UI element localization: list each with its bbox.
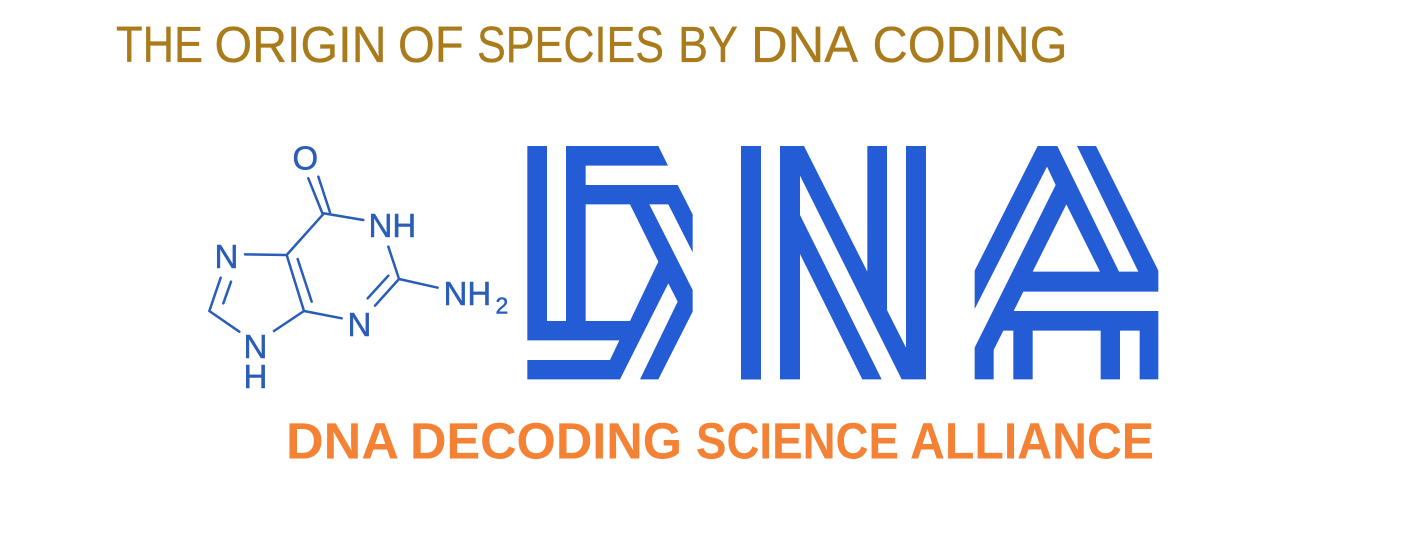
molecule atom labels: H [244, 358, 267, 395]
subtitle: alliance name: DECODING [410, 412, 682, 470]
icon: guanine molecule [209, 140, 508, 395]
title: THE [116, 16, 203, 73]
molecule atom labels: N [348, 306, 371, 343]
logo letter N [780, 146, 926, 379]
title: ORIGIN [214, 16, 386, 73]
logo letter A [975, 146, 1158, 379]
molecule bonds [209, 177, 438, 332]
title: OF [398, 16, 464, 73]
subtitle: alliance name [286, 412, 1154, 470]
molecule atom labels: NH [368, 207, 416, 244]
molecule atom labels: NH [444, 275, 491, 312]
title [116, 16, 1068, 73]
subtitle: alliance name: ALLIANCE [910, 412, 1154, 470]
title: SPECIES [477, 16, 664, 73]
title: BY [678, 16, 738, 73]
molecule atom labels: O [292, 140, 318, 176]
molecule atom labels: N [244, 328, 267, 365]
title: CODING [872, 16, 1068, 73]
subtitle: alliance name: SCIENCE [696, 412, 899, 470]
logo: DNA letters [527, 146, 1158, 380]
logo letter D [527, 146, 693, 379]
molecule atom labels: 2 [496, 292, 508, 318]
title: DNA [751, 16, 858, 73]
logo letter I [741, 146, 761, 380]
molecule atom labels: N [214, 238, 238, 275]
subtitle: alliance name: DNA [286, 412, 399, 470]
molecule atom labels [214, 140, 508, 395]
